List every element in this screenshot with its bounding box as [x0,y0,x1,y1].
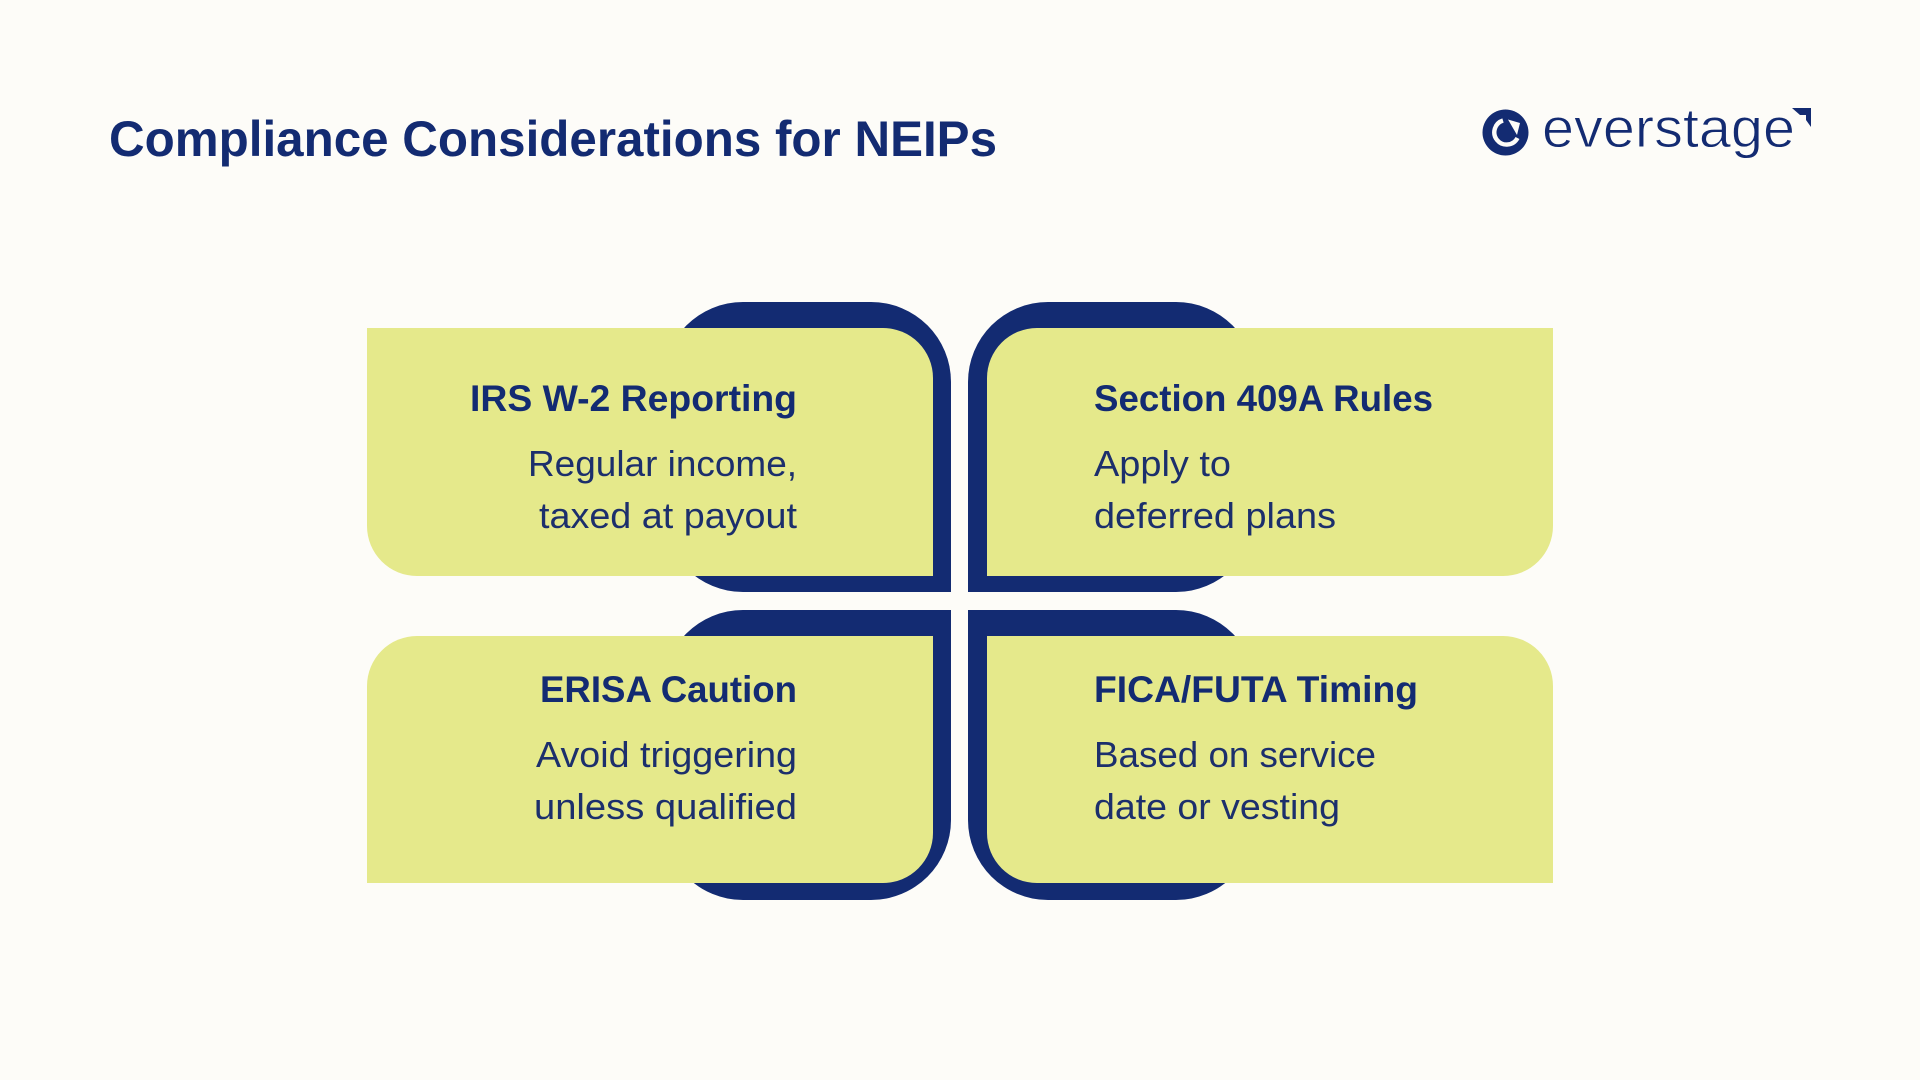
panel: Section 409A Rules [968,302,1553,592]
navy backing shape [968,610,1256,900]
lime card [987,636,1553,883]
card body text [1094,443,1336,536]
card body text: date or vesting [1094,786,1340,827]
card body text [534,734,797,827]
logo: everstage [1482,96,1811,159]
icon: logo corner tick [1792,108,1811,127]
card body text: taxed at payout [539,495,797,536]
card heading: ERISA Caution [540,669,797,710]
card heading: Section 409A Rules [1094,378,1433,419]
panel: ERISA Caution [367,610,951,900]
card body text: unless qualified [534,786,797,827]
title: Compliance Considerations for NEIPs [109,111,997,167]
logo wordmark: everstage [1542,96,1795,159]
icon: logo mark [1482,110,1528,156]
lime card [987,328,1553,576]
card body text: Based on service [1094,734,1376,775]
navy backing shape [663,610,951,900]
card heading: FICA/FUTA Timing [1094,669,1418,710]
lime card [367,328,933,576]
panel: FICA/FUTA Timing [968,610,1553,900]
card body text: Regular income, [528,443,797,484]
panel: IRS W-2 Reporting [367,302,951,592]
card body text: Apply to [1094,443,1231,484]
navy backing shape [663,302,951,592]
card body text: Avoid triggering [536,734,797,775]
navy backing shape [968,302,1256,592]
card body text [1094,734,1376,827]
lime card [367,636,933,883]
card body text [528,443,797,536]
card body text: deferred plans [1094,495,1336,536]
card heading: IRS W-2 Reporting [470,378,797,419]
